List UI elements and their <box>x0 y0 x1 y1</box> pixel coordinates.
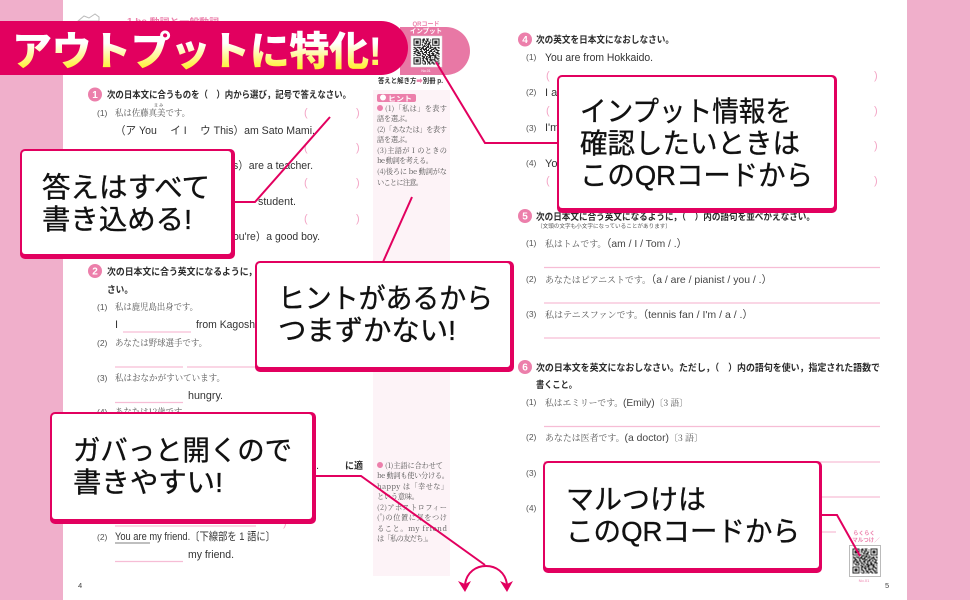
question 6 instruction <box>536 362 880 391</box>
question 4 items: I a <box>545 87 558 99</box>
question 5 items: 私はテニスファンです。（tennis fan / I'm / a / .） <box>545 308 753 321</box>
hint box lower: ること。my friend <box>377 524 447 534</box>
question 4 items <box>526 52 878 187</box>
left page: question 2 <box>88 264 257 418</box>
question 4 items: (4) <box>526 158 537 168</box>
hint text: (2)「あなたは」を表す <box>377 125 447 135</box>
question 1 items: ) <box>356 142 360 154</box>
callout: grade answers from this QR code <box>543 461 822 573</box>
question 5 items: 私はトムです。（am / I / Tom / .） <box>545 237 687 250</box>
hint box upper <box>377 94 447 188</box>
question 6 instruction: 書くこと。 <box>536 379 577 391</box>
hint column background <box>373 90 450 576</box>
callout: opens flat so easy to write: ガバっと開くので <box>73 429 292 469</box>
question 2 items <box>97 300 256 418</box>
callout: check input info from this QR code: インプット情報を <box>580 90 792 130</box>
leader line: write-in callout to answer blanks <box>233 117 330 202</box>
question 2 items: (1) <box>97 302 108 312</box>
question 1 items: ま み <box>154 102 163 108</box>
callout: all answers can be written in <box>20 149 235 259</box>
question 4 items: You <box>545 158 564 170</box>
question 1 items: ( <box>304 107 308 119</box>
leader line: input QR callout to QR code <box>436 62 558 143</box>
question 2 items: (3) <box>97 373 108 383</box>
question 1 items: 私は佐藤真美です。 <box>115 106 190 119</box>
question 5 items <box>526 237 880 338</box>
left page: question 3 fragments: ) <box>283 517 287 529</box>
right page: question 5 <box>518 209 880 338</box>
question 2 items: I <box>115 319 118 331</box>
left page: question 3 fragments: に適 <box>345 460 363 472</box>
question 1 items: student. <box>258 196 296 208</box>
callout: hints prevent getting stuck: ヒントがあるから <box>278 277 493 317</box>
hint box lower: (1)主語に合わせて <box>385 461 443 471</box>
left page: question 1 <box>88 88 360 243</box>
hint box lower: (')の位置に気をつけ <box>377 513 447 523</box>
callout: opens flat so easy to write <box>50 412 316 524</box>
question 1 items: s）are a teacher. <box>233 159 313 172</box>
question 2 items: (4) <box>97 407 108 417</box>
hint text: be 動詞を考える。 <box>377 156 433 166</box>
pink semicircle header with input QR code <box>400 21 470 75</box>
question 5 number badge <box>518 209 532 223</box>
hint text: 語を選ぶ。 <box>377 135 412 145</box>
question 2 number badge: 2 <box>92 266 98 278</box>
question 4 items: ( <box>546 175 550 187</box>
callout: opens flat so easy to write: 書きやすい! <box>73 461 223 501</box>
chapter header peeking above the banner: 1 be 動詞と一般動詞 <box>127 16 219 26</box>
callout: grade answers from this QR code: このQRコードから <box>566 510 800 550</box>
question 2 instruction: さい。 <box>107 285 133 296</box>
left page: question 3 fragments: You are my friend.〔下線部を 1 語に〕 <box>115 530 275 543</box>
answer check QR label <box>852 530 880 544</box>
question 5 items: (2) <box>526 274 537 284</box>
callout: all answers can be written in: 書き込める! <box>42 198 192 238</box>
question 5 number badge: 5 <box>522 212 528 222</box>
question 1 items: (1) <box>97 108 108 118</box>
question 2 items: (2) <box>97 338 108 348</box>
question 4 items: (1) <box>526 52 537 62</box>
hint text: (1)「私は」を表す <box>385 104 447 114</box>
question 4 items: ) <box>874 175 878 187</box>
question 1 items: ( <box>304 177 308 189</box>
question 6 items <box>526 396 880 532</box>
input QR label <box>410 21 442 35</box>
hint text: (3)主語が I のときの <box>377 146 447 156</box>
question 4 items: ( <box>546 70 550 82</box>
question 6 items: あなたは医者です。(a doctor)〔3 語〕 <box>545 431 703 444</box>
hint label: ヒント <box>388 95 412 103</box>
callout: hints prevent getting stuck: つまずかない! <box>278 309 456 349</box>
answer check QR code: No.01 <box>859 578 870 583</box>
right page: question 6 <box>518 360 880 532</box>
question 4 items: You are from Hokkaido. <box>545 52 653 64</box>
question 6 instruction: 次の日本文を英文になおしなさい。ただし，（ ）内の語句を使い，指定された語数で <box>536 362 880 374</box>
question 5 instruction <box>536 211 815 230</box>
hint text: いことに注意。 <box>377 178 423 188</box>
question 4 items: ( <box>546 105 550 117</box>
question 4 items: ) <box>874 140 878 152</box>
callout: all answers can be written in: 答えはすべて <box>42 166 210 206</box>
question 4 items: ) <box>874 70 878 82</box>
question 1 items: ) <box>356 213 360 225</box>
question 4 instruction: 次の英文を日本文になおしなさい。 <box>536 34 674 46</box>
callout: check input info from this QR code: 確認したいときは <box>580 122 800 162</box>
input QR label: インプット <box>410 27 442 35</box>
hint box lower: は「私の友だち」。 <box>377 534 433 544</box>
hint text: (4)後ろに be 動詞がな <box>377 167 447 177</box>
question 1 items: ( <box>304 142 308 154</box>
question 2 instruction: 次の日本文に合う英文になるように， <box>107 266 257 278</box>
question 1 items: ) <box>356 177 360 189</box>
question 1 items: ) <box>356 107 360 119</box>
pink semicircle header with input QR code: No.01 <box>421 69 431 73</box>
question 6 items: (4) <box>526 503 537 513</box>
question 6 number badge <box>518 360 532 374</box>
question 4 items: ) <box>874 105 878 117</box>
question 2 items: あなたは12歳です。 <box>115 405 190 418</box>
hint box lower <box>377 461 449 544</box>
question 6 items: (3) <box>526 468 537 478</box>
question 4 items: (3) <box>526 123 537 133</box>
leader line: hint callout to hint column <box>383 197 412 262</box>
left pink margin band <box>0 0 63 600</box>
question 5 items: (3) <box>526 309 537 319</box>
question 1 items <box>97 102 360 243</box>
answer check QR label: マルつけ／ <box>852 537 880 544</box>
right pink margin band <box>907 0 970 600</box>
question 1 instruction: 次の日本文に合うものを（ ）内から選び，記号で答えなさい。 <box>107 89 351 101</box>
question 4 items: I'm <box>545 122 559 134</box>
icon: curved arrows showing the book opening <box>458 566 513 592</box>
chapter header peeking above the banner <box>78 14 219 26</box>
input QR label: QRコード <box>412 21 440 28</box>
callout: check input info from this QR code: このQRコードから <box>580 154 813 194</box>
hint text <box>377 104 447 188</box>
question 1 number badge <box>88 88 102 102</box>
callout: check input info from this QR code <box>557 75 837 213</box>
callout: hints prevent getting stuck <box>255 261 514 372</box>
question 4 items: (2) <box>526 87 537 97</box>
question 5 items: (1) <box>526 238 537 248</box>
banner title: アウトプットに特化! <box>12 30 382 74</box>
question 4 number badge: 4 <box>522 35 528 46</box>
hint box lower: be 動詞も使い分ける。 <box>377 471 449 481</box>
leader line: answer check callout to QR code <box>821 515 860 556</box>
hint text: 語を選ぶ。 <box>377 114 412 124</box>
question 2 items: 私はおなかがすいています。 <box>115 371 225 384</box>
hint box lower: という意味。 <box>377 492 419 502</box>
answers reference: 答えと解き方➡別冊 p. <box>378 76 443 85</box>
left page: question 3 fragments <box>97 460 363 562</box>
question 1 items: ou're）a good boy. <box>233 230 320 243</box>
question 2 items: hungry. <box>188 390 223 402</box>
callout: grade answers from this QR code: マルつけは <box>566 478 706 518</box>
question 5 instruction: 〔文頭の文字も小文字になっていることがあります〕 <box>537 222 671 230</box>
question 5 instruction: 次の日本文に合う英文になるように，（ ）内の語句を並べかえなさい。 <box>536 211 815 223</box>
left page: question 3 fragments: (2) <box>97 532 108 542</box>
page number 4: 4 <box>78 581 82 590</box>
question 1 items: ( <box>304 213 308 225</box>
question 2 number badge <box>88 264 102 278</box>
answer check QR code <box>850 530 880 583</box>
hint box lower: (2)アポストロフィー <box>377 503 447 513</box>
question 5 items: あなたはピアニストです。（a / are / pianist / you / .） <box>545 273 772 286</box>
question 2 items: あなたは野球選手です。 <box>115 336 207 349</box>
left page: question 3 fragments: . <box>316 460 319 472</box>
question 2 items: 私は鹿児島出身です。 <box>115 300 198 313</box>
question 2 items: from Kagosh <box>196 319 255 331</box>
question 6 items: (2) <box>526 432 537 442</box>
answer check QR label: らくらく <box>853 530 875 537</box>
question 2 instruction <box>107 266 257 296</box>
right page: question 4 <box>518 32 878 187</box>
left page: question 3 fragments: my friend. <box>188 549 234 561</box>
leader line: opens flat callout to spine <box>315 476 485 565</box>
hint box lower: happy は「幸せな」 <box>377 482 448 492</box>
question 1 items: （ア You イ I ウ This）am Sato Mami. <box>115 124 315 137</box>
question 1 number badge: 1 <box>92 90 98 101</box>
question 6 items: (1) <box>526 397 537 407</box>
question 4 number badge <box>518 32 532 46</box>
page number 5: 5 <box>885 581 889 590</box>
question 6 number badge: 6 <box>522 362 528 374</box>
input QR code <box>411 36 442 67</box>
question 6 items: 私はエミリーです。(Emily)〔3 語〕 <box>545 396 688 409</box>
